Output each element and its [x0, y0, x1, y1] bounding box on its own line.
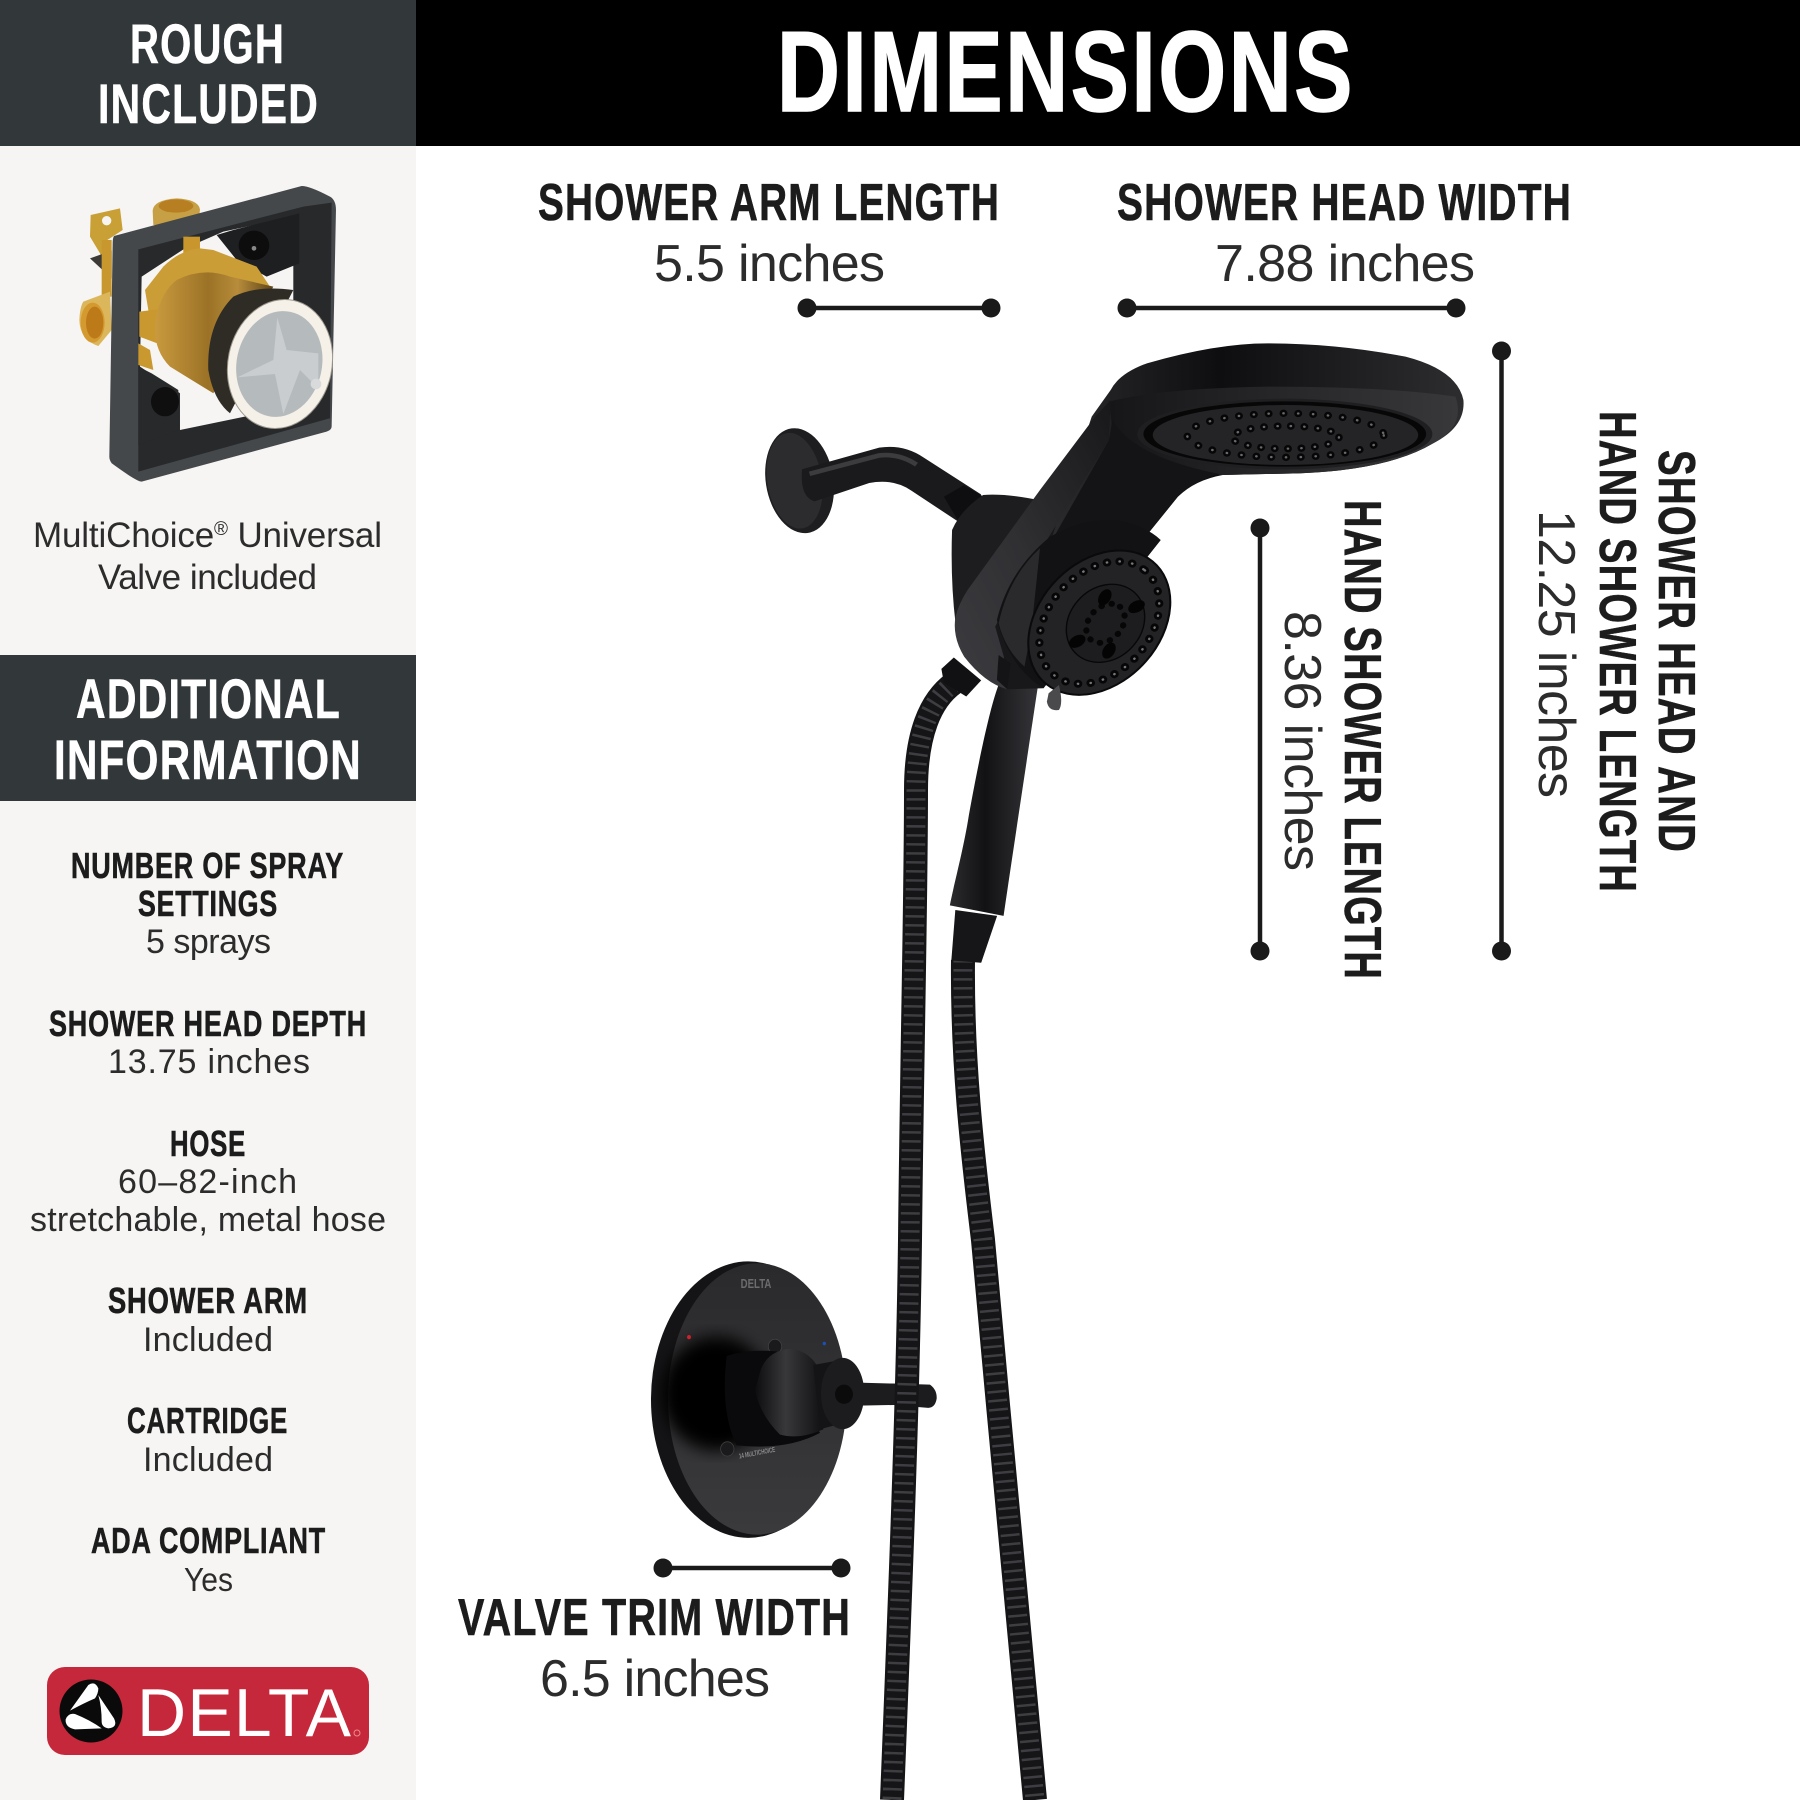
spec: hose	[30, 1123, 386, 1239]
caption: valve included: Universal	[228, 516, 382, 555]
spec: shower arm	[108, 1280, 308, 1359]
dimension: shower arm length: 5.5 inches	[654, 235, 885, 293]
spec: shower head depth	[49, 1003, 367, 1081]
spec: shower head depth: SHOWER HEAD DEPTH	[49, 1003, 367, 1044]
illustration: rough valve	[79, 186, 344, 482]
logo: delta	[47, 1667, 369, 1755]
illustration: valve trim: DELTA	[741, 1276, 771, 1291]
illustration: shower arm and hand shower handle	[758, 424, 1038, 963]
dimension: hand shower length	[1250, 500, 1391, 980]
spec: shower arm: Included	[143, 1321, 273, 1359]
title banner: dimensions: DIMENSIONS	[777, 9, 1355, 136]
caption: valve included: Valve included	[98, 558, 317, 597]
dimension: shower head width: 7.88 inches	[1215, 235, 1475, 293]
title banner: dimensions	[416, 0, 1800, 146]
dimension: shower head width: SHOWER HEAD WIDTH	[1117, 174, 1572, 232]
spec: shower arm: SHOWER ARM	[108, 1280, 308, 1321]
dimension: hand shower length: HAND SHOWER LENGTH	[1333, 500, 1391, 980]
dimension: valve trim width: 6.5 inches	[540, 1650, 770, 1708]
spec: hose: HOSE	[170, 1123, 246, 1164]
header: additional information: ADDITIONAL	[76, 667, 341, 730]
spec: hose: 60–82-inch	[118, 1163, 297, 1201]
caption: valve included: ®	[214, 519, 228, 540]
header: rough included	[0, 0, 416, 146]
spec: hose: stretchable, metal hose	[30, 1201, 386, 1239]
dimension: valve trim width: VALVE TRIM WIDTH	[458, 1589, 851, 1647]
spec: spray settings: 5 sprays	[146, 923, 271, 961]
dimension: shower head and hand shower length: HAND SHOWER LENGTH	[1588, 411, 1646, 893]
dimension: shower head and hand shower length	[1492, 342, 1705, 960]
dimension: shower head and hand shower length: 12.25 inches	[1527, 510, 1585, 798]
illustration: valve trim	[651, 1261, 937, 1538]
dimension: hand shower length: 8.36 inches	[1273, 611, 1331, 871]
spec: spray settings	[71, 845, 344, 961]
spec: cartridge: Included	[143, 1441, 273, 1479]
caption: valve included	[33, 516, 382, 597]
header: additional information	[0, 655, 416, 801]
dimension: shower head width	[1117, 174, 1572, 318]
panel: sidebar background	[0, 0, 416, 1800]
spec: spray settings: NUMBER OF SPRAY	[71, 845, 344, 886]
illustration: dual shower head	[952, 343, 1464, 722]
dimension: shower arm length	[538, 174, 1000, 318]
spec: shower head depth: 13.75 inches	[108, 1043, 310, 1081]
spec: spray settings: SETTINGS	[138, 883, 278, 924]
spec: ada compliant: Yes	[184, 1561, 233, 1598]
header: rough included: INCLUDED	[98, 72, 319, 135]
logo: delta: DELTA	[137, 1675, 352, 1751]
spec: ada compliant: ADA COMPLIANT	[91, 1520, 326, 1561]
dimension: shower arm length: SHOWER ARM LENGTH	[538, 174, 1000, 232]
dimension: valve trim width	[458, 1558, 851, 1708]
spec: ada compliant	[91, 1520, 326, 1598]
header: additional information: INFORMATION	[54, 728, 362, 791]
dimension: shower head and hand shower length: SHOWER HEAD AND	[1647, 450, 1705, 853]
caption: valve included: MultiChoice	[33, 516, 214, 555]
spec: cartridge	[127, 1400, 288, 1479]
spec: cartridge: CARTRIDGE	[127, 1400, 288, 1441]
illustration: valve trim: 14 MULTICHOICE	[738, 1447, 776, 1461]
illustration: metal hoses	[892, 683, 1035, 1800]
header: rough included: ROUGH	[130, 12, 285, 75]
